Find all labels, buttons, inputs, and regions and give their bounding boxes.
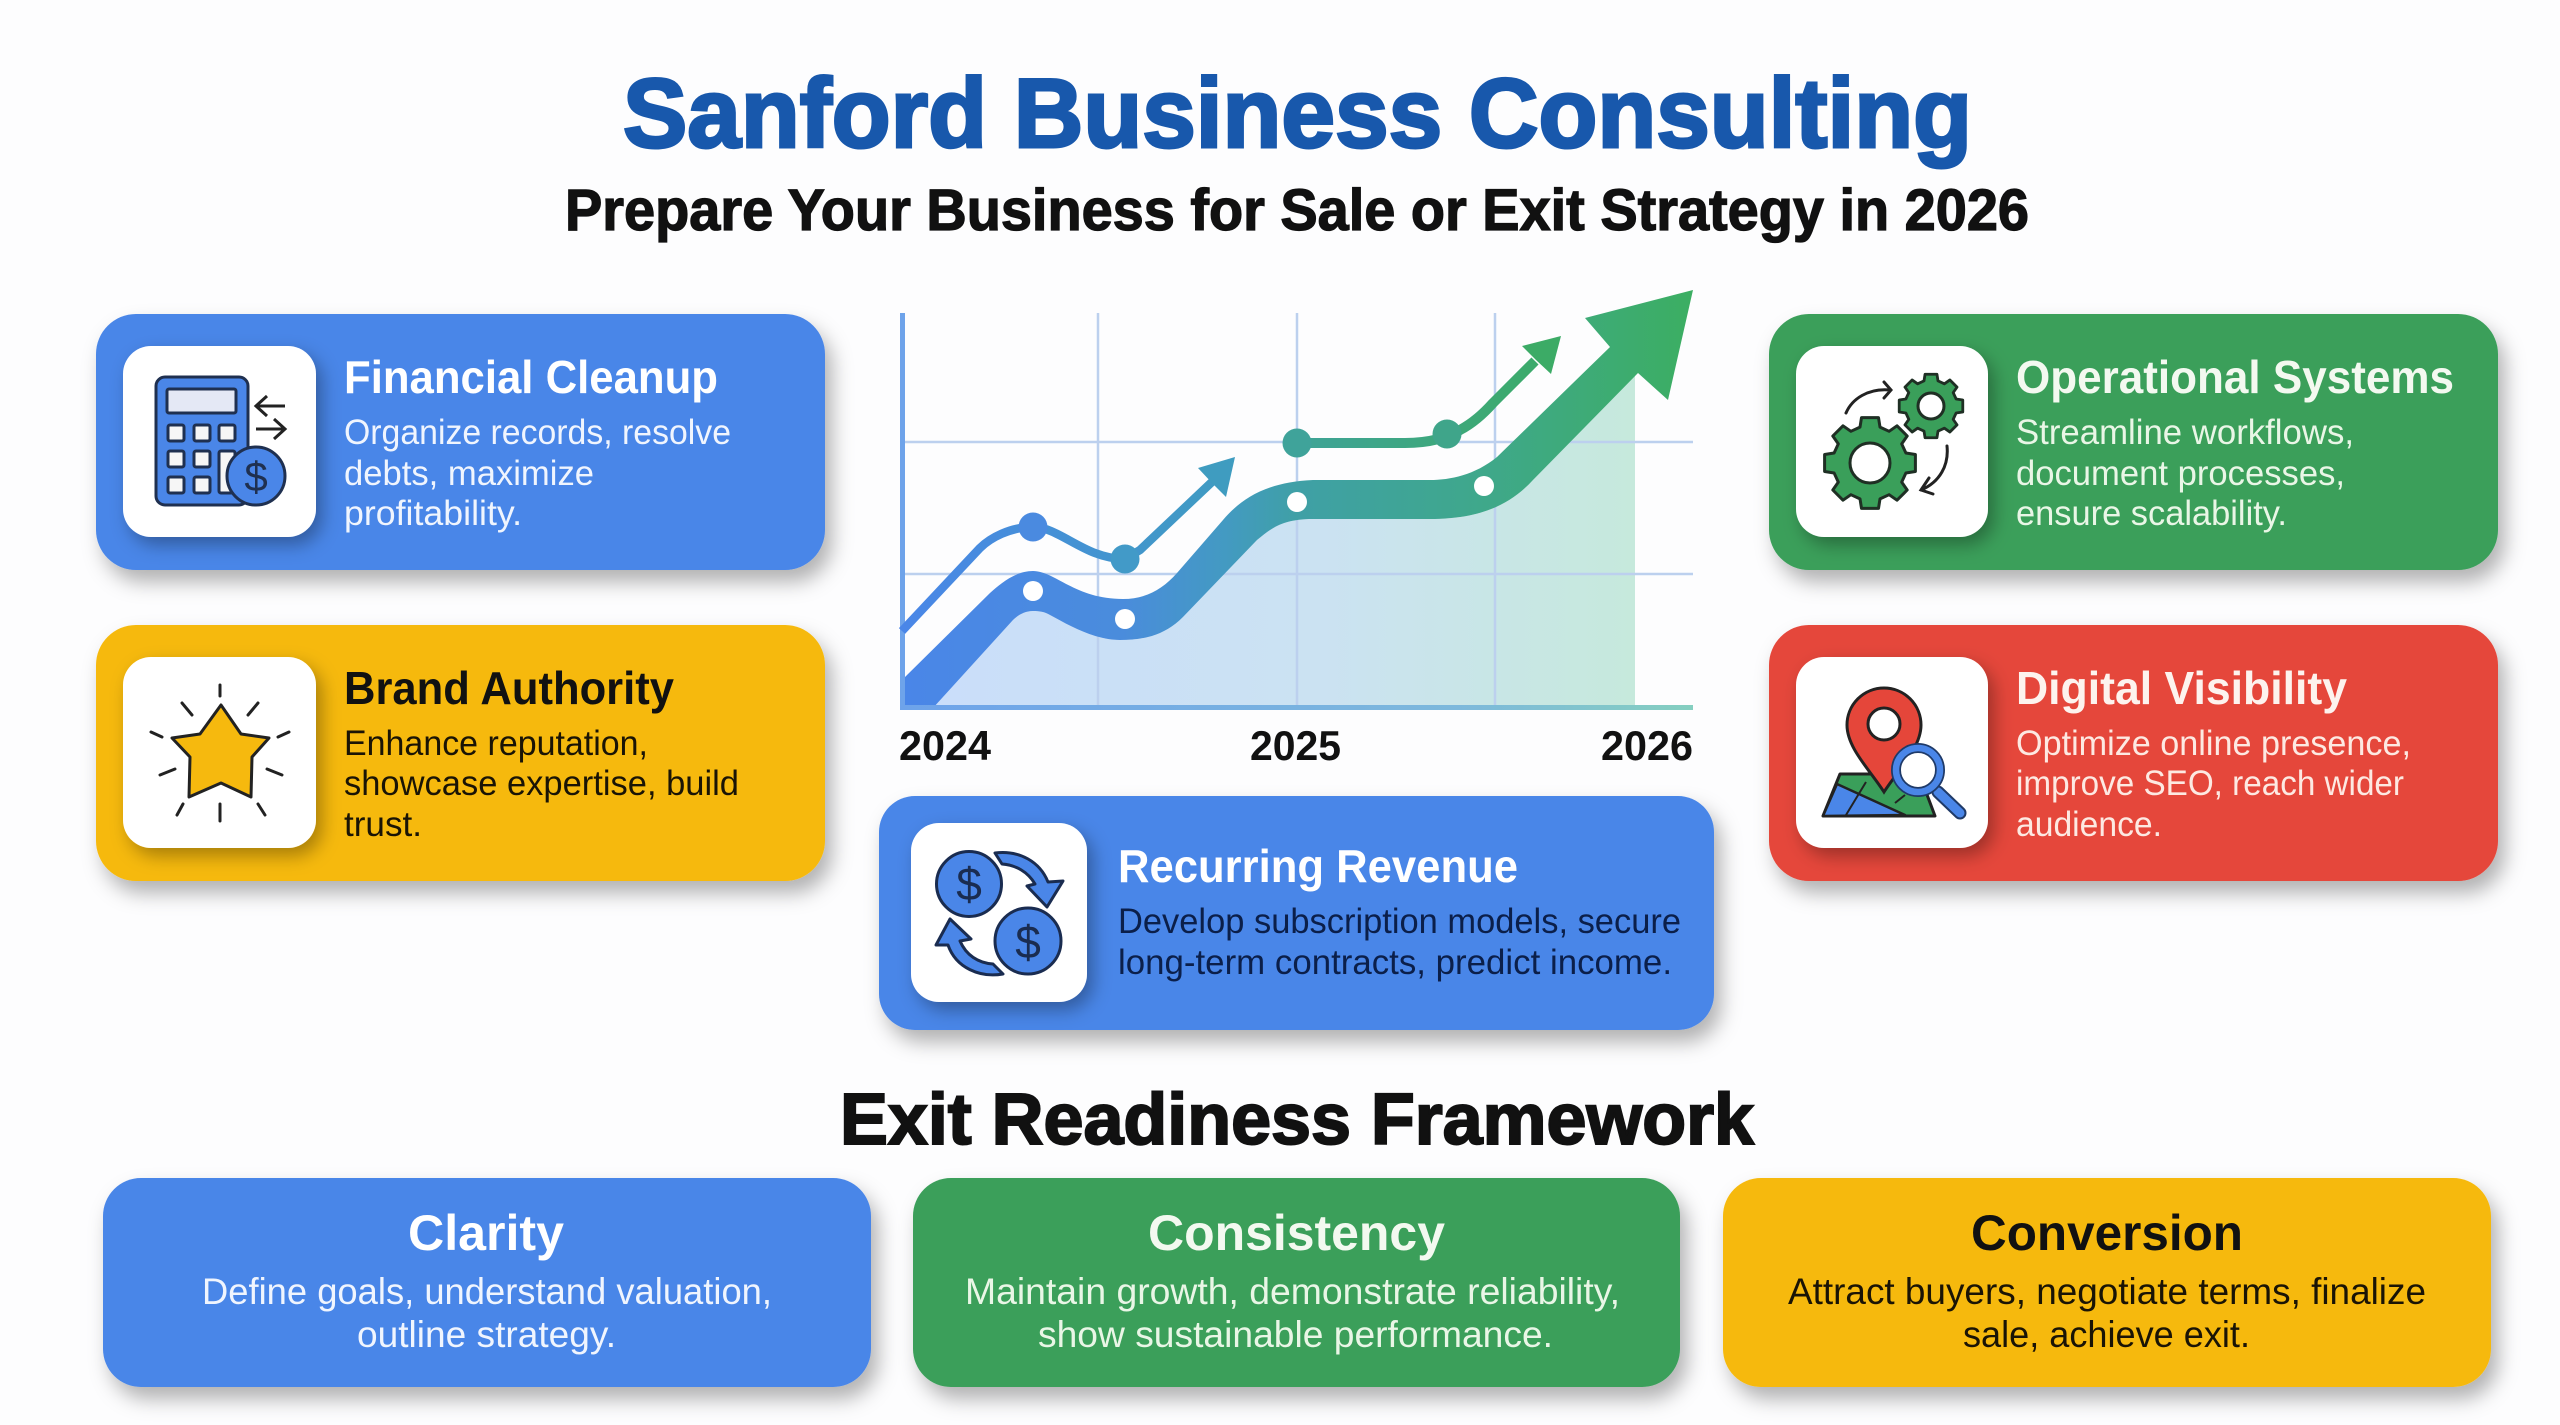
panel: financial cleanup (96, 314, 825, 570)
text: operational systems description (2016, 413, 2354, 533)
secondary trend arrow left (902, 457, 1235, 631)
heading: financial cleanup: Financial Cleanup (344, 351, 718, 403)
text: clarity description (202, 1271, 772, 1355)
heading: recurring revenue: Recurring Revenue (1118, 840, 1518, 892)
axis label 2026: 2026 (1601, 722, 1693, 769)
text: operational systems description: Streamline workflows, (2016, 413, 2354, 452)
panel: consistency (913, 1178, 1680, 1387)
text: brand authority description: Enhance reputation, (344, 724, 648, 763)
heading: brand authority: Brand Authority (344, 662, 674, 714)
subtitle: Prepare Your Business for Sale or Exit Strategy in 2026 (565, 178, 2029, 243)
text: brand authority description: showcase expertise, build (344, 764, 739, 803)
panel: conversion (1723, 1178, 2491, 1387)
secondary trend arrow right (1282, 336, 1561, 458)
heading: operational systems: Operational Systems (2016, 351, 2454, 403)
text: conversion description: Attract buyers, negotiate terms, finalize (1788, 1271, 2426, 1312)
icon: recurring dollar coins (936, 852, 1063, 975)
shaded area under curve (933, 375, 1635, 708)
axis label 2025: 2025 (1250, 722, 1341, 769)
chart: growth line chart (899, 290, 1693, 769)
text: digital visibility description: audience. (2016, 805, 2162, 844)
heading: exit readiness framework: Exit Readiness Framework (840, 1080, 1755, 1160)
panel: brand authority (96, 625, 825, 881)
icon: star (151, 685, 289, 821)
text: financial cleanup description: Organize records, resolve (344, 413, 731, 452)
icon: calculator with coin: $ (244, 453, 268, 500)
panel: recurring revenue (879, 796, 1714, 1030)
text: digital visibility description: Optimize online presence, (2016, 724, 2411, 763)
text: brand authority description (344, 724, 739, 844)
text: conversion description (1788, 1271, 2426, 1355)
text: clarity description: Define goals, understand valuation, (202, 1271, 772, 1312)
text: digital visibility description: improve SEO, reach wider (2016, 764, 2404, 803)
main growth arrow (902, 290, 1693, 708)
axis label 2024: 2024 (899, 722, 992, 769)
text: financial cleanup description: profitability. (344, 494, 522, 533)
text: digital visibility description (2016, 724, 2411, 844)
title: Sanford Business Consulting (623, 58, 1972, 168)
icon: recurring dollar coins: $ (956, 858, 982, 910)
text: consistency description: Maintain growth, demonstrate reliability, (965, 1271, 1620, 1312)
heading: consistency: Consistency (1148, 1205, 1445, 1261)
text: financial cleanup description (344, 413, 731, 533)
heading: digital visibility: Digital Visibility (2016, 662, 2347, 714)
panel: operational systems (1769, 314, 2498, 570)
text: consistency description (965, 1271, 1620, 1355)
icon: gears (1825, 374, 1963, 508)
icon: calculator with coin (156, 377, 285, 505)
text: conversion description: sale, achieve exit. (1963, 1314, 2250, 1355)
text: recurring revenue description: long-term contracts, predict income. (1118, 943, 1672, 982)
heading: clarity: Clarity (408, 1205, 564, 1261)
text: operational systems description: ensure scalability. (2016, 494, 2287, 533)
icon: recurring dollar coins: $ (1015, 916, 1041, 968)
text: recurring revenue description: Develop subscription models, secure (1118, 902, 1681, 941)
text: financial cleanup description: debts, maximize (344, 454, 594, 493)
heading: conversion: Conversion (1971, 1205, 2243, 1261)
text: consistency description: show sustainable performance. (1038, 1314, 1553, 1355)
icon: map pin with magnifier (1823, 688, 1960, 816)
text: recurring revenue description (1118, 902, 1681, 982)
text: operational systems description: document processes, (2016, 454, 2345, 493)
panel: clarity (103, 1178, 871, 1387)
text: brand authority description: trust. (344, 805, 422, 844)
text: clarity description: outline strategy. (357, 1314, 616, 1355)
panel: digital visibility (1769, 625, 2498, 881)
